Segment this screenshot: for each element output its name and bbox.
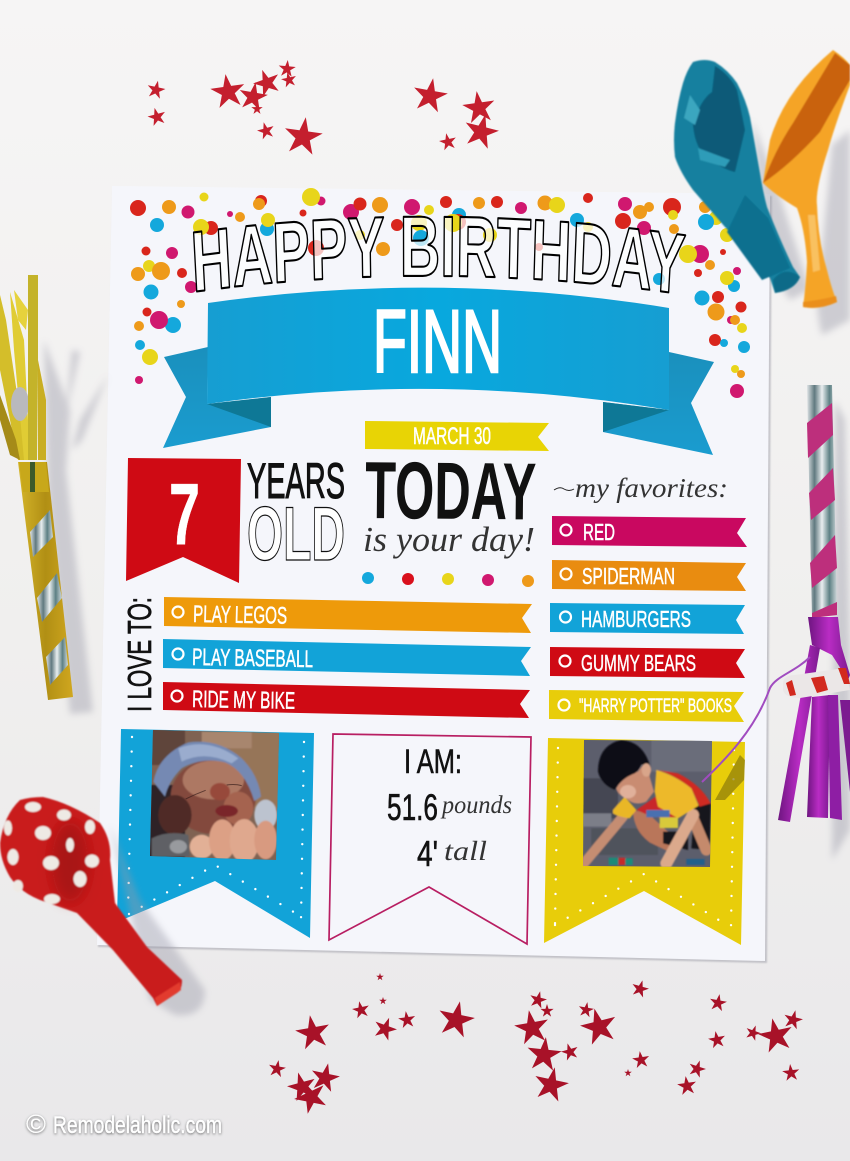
date tag: March 30: MARCH 30	[413, 423, 491, 450]
heading: my favorites: my favorites:	[575, 473, 728, 503]
measurement banner: I am: 51.6	[387, 787, 438, 828]
blower fringe	[0, 290, 46, 460]
confetti dots	[130, 188, 750, 398]
text: years old: OLD	[247, 492, 345, 577]
favorite: hamburgers: HAMBURGERS	[581, 606, 691, 632]
watermark	[26, 1109, 222, 1139]
love: ride my bike: RIDE MY BIKE	[192, 686, 295, 715]
favorite: harry potter books	[549, 690, 744, 722]
favorite: harry potter books: "HARRY POTTER" BOOKS	[579, 696, 732, 717]
age flag: 7: 7	[169, 466, 200, 563]
text: today is your day: TODAY	[365, 446, 537, 537]
age flag: 7	[126, 458, 241, 583]
name: FINN	[373, 291, 502, 391]
balloon: orange	[763, 50, 850, 308]
party blower: magenta	[702, 385, 850, 822]
measurement banner: I am: pounds	[440, 792, 512, 819]
text: years old	[247, 453, 345, 577]
measurement banner: I am: tall	[444, 836, 487, 866]
heading: I love to: I LOVE TO:	[121, 597, 158, 712]
love: ride my bike	[163, 682, 530, 718]
watermark: Remodelaholic.com	[53, 1112, 222, 1139]
love: play legos	[164, 597, 532, 633]
favorite: red	[552, 516, 747, 547]
balloon: teal	[674, 60, 800, 293]
text: today is your day	[363, 446, 537, 559]
blower paper roll	[783, 668, 850, 698]
photo: boy playing	[583, 740, 712, 867]
left ribbon tail	[163, 347, 271, 448]
favorite: spiderman	[552, 560, 746, 591]
paper shadow	[98, 188, 772, 963]
watermark: ©	[26, 1109, 46, 1139]
ribbon banner: Finn	[163, 288, 714, 455]
blower tube	[18, 462, 73, 700]
blower string	[702, 657, 810, 782]
text: years old: YEARS	[247, 453, 345, 509]
favorite: gummy bears	[550, 647, 745, 678]
love: play legos: PLAY LEGOS	[193, 601, 287, 630]
love: play baseball	[163, 639, 531, 676]
favorite: gummy bears: GUMMY BEARS	[581, 650, 696, 676]
blower tube	[807, 385, 837, 617]
heading: Happy Birthday	[192, 216, 686, 294]
favorites list	[549, 516, 747, 722]
photo: newborn baby	[150, 730, 279, 860]
blower fringe	[808, 617, 850, 680]
dot row	[362, 572, 534, 587]
measurement banner: I am: 4'	[417, 833, 438, 874]
ribbon main band	[207, 288, 669, 410]
party blower: gold	[0, 275, 73, 700]
photo banner: yellow	[544, 735, 745, 945]
measurement banner: I am	[329, 734, 531, 944]
text: today is your day: is your day!	[363, 520, 535, 559]
blower shadow on yellow banner	[715, 755, 745, 800]
measurement banner: I am: I AM:	[404, 743, 462, 781]
photo banner: blue	[117, 725, 314, 938]
favorite: spiderman: SPIDERMAN	[582, 563, 675, 589]
heading: Happy Birthday: HAPPY BIRTHDAY	[192, 216, 686, 294]
confetti stars: bottom	[267, 973, 805, 1116]
love: play baseball: PLAY BASEBALL	[192, 644, 313, 673]
balloon and blower shadows	[44, 120, 850, 1015]
right ribbon tail	[603, 352, 714, 455]
confetti stars: top	[146, 59, 502, 156]
balloon: red polka dot	[0, 797, 182, 1006]
date tag: March 30	[365, 421, 549, 451]
paper sheet	[97, 186, 770, 961]
love list	[163, 597, 532, 718]
favorite: red: RED	[583, 519, 615, 545]
